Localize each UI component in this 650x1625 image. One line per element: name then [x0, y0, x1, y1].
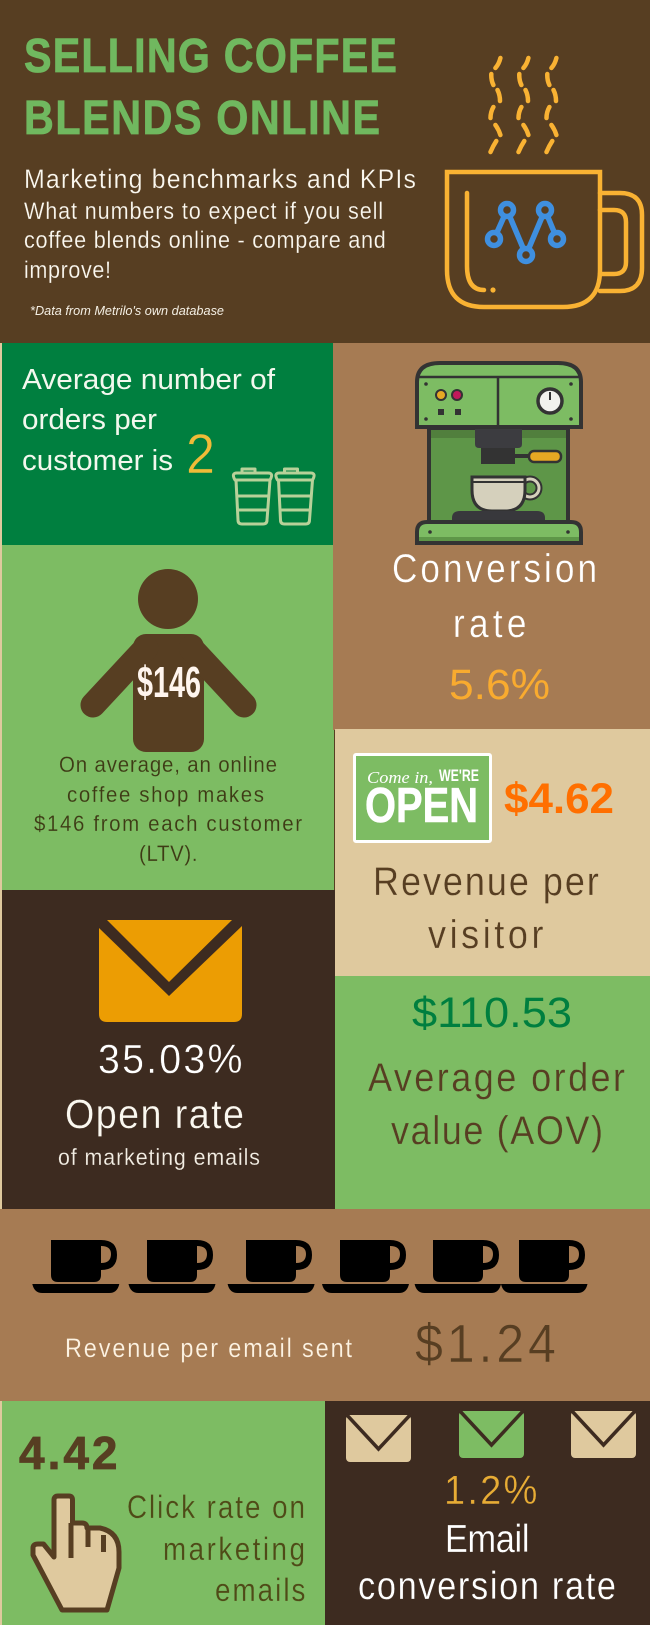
value: 4.42: 4.42: [19, 1427, 118, 1479]
conversion label: rate: [453, 601, 526, 645]
open rate sublabel: of marketing emails: [58, 1144, 260, 1170]
panel: revenue per email: [0, 1209, 650, 1401]
subtitle: Marketing benchmarks and KPIs: [24, 165, 416, 194]
icon: three envelopes: [346, 1410, 636, 1462]
revenue per visitor label: visitor: [428, 913, 544, 957]
panel: conversion rate: [333, 343, 650, 730]
intro text: What numbers to expect if you sell: [24, 197, 383, 224]
click rate label: marketing: [163, 1532, 305, 1567]
orders text: orders per: [22, 404, 157, 436]
panel: open rate: [2, 890, 335, 1209]
panel: average order value: [335, 976, 650, 1209]
title: BLENDS ONLINE: [24, 91, 380, 145]
icon: steam: [490, 58, 556, 152]
open rate label: Open rate: [65, 1092, 244, 1137]
value: $1.24: $1.24: [415, 1314, 556, 1374]
LTV description: On average, an online: [59, 752, 277, 777]
icon: pointing hand: [33, 1496, 119, 1610]
LTV description: coffee shop makes: [67, 782, 264, 807]
value: $110.53: $110.53: [412, 989, 572, 1037]
orders text: Average number of: [22, 364, 276, 396]
click rate label: [127, 1490, 305, 1608]
intro text: improve!: [24, 256, 111, 283]
icon: open sign: [354, 754, 490, 842]
LTV description: [34, 752, 302, 866]
value: 5.6%: 5.6%: [449, 661, 550, 709]
AOV label: value (AOV): [391, 1109, 603, 1153]
icon: open sign: WE'RE: [439, 766, 479, 785]
title: [24, 29, 397, 145]
icon: coffee mug with logo: [447, 172, 642, 307]
email conversion label: [358, 1517, 616, 1607]
panel: click rate: [2, 1401, 325, 1625]
AOV label: Average order: [368, 1056, 625, 1100]
revenue per visitor label: Revenue per: [373, 860, 599, 904]
panel: revenue per visitor: [335, 729, 650, 976]
click rate label: Click rate on: [127, 1490, 305, 1525]
intro text: [24, 197, 386, 283]
conversion label: Conversion: [392, 546, 597, 590]
left edge sliver: [0, 343, 3, 1625]
title: SELLING COFFEE: [24, 29, 397, 83]
revenue per visitor label: [373, 860, 599, 957]
click rate label: emails: [215, 1573, 305, 1608]
LTV description: $146 from each customer: [34, 811, 302, 836]
panel: customer lifetime value: [2, 545, 334, 890]
AOV label: [368, 1056, 625, 1153]
icon: person: [93, 569, 244, 752]
number: 2: 2: [186, 422, 215, 485]
icon: open sign: Come in,: [367, 768, 433, 787]
LTV description: (LTV).: [139, 841, 197, 866]
email conversion label: Email: [445, 1517, 529, 1560]
icon: two takeaway cups: [233, 469, 314, 524]
intro text: coffee blends online - compare and: [24, 226, 386, 253]
icon: espresso machine: [417, 363, 581, 543]
icon: envelope: [99, 920, 242, 1022]
email conversion label: conversion rate: [358, 1564, 616, 1607]
conversion label: [392, 546, 597, 645]
orders text: [22, 364, 276, 477]
panel: header: [0, 0, 650, 343]
value: 35.03%: 35.03%: [98, 1036, 242, 1082]
value: 1.2%: 1.2%: [444, 1468, 537, 1513]
revenue per email label: Revenue per email sent: [65, 1334, 352, 1363]
panel: email conversion rate: [325, 1401, 650, 1625]
value: $146: $146: [137, 658, 201, 707]
icon: row of six coffee cups: [32, 1240, 588, 1293]
data source note: *Data from Metrilo's own database: [30, 304, 224, 318]
orders text: customer is: [22, 445, 173, 477]
value: $4.62: $4.62: [504, 775, 614, 823]
icon: open sign: OPEN: [365, 779, 478, 833]
panel: orders per customer: [2, 343, 333, 545]
